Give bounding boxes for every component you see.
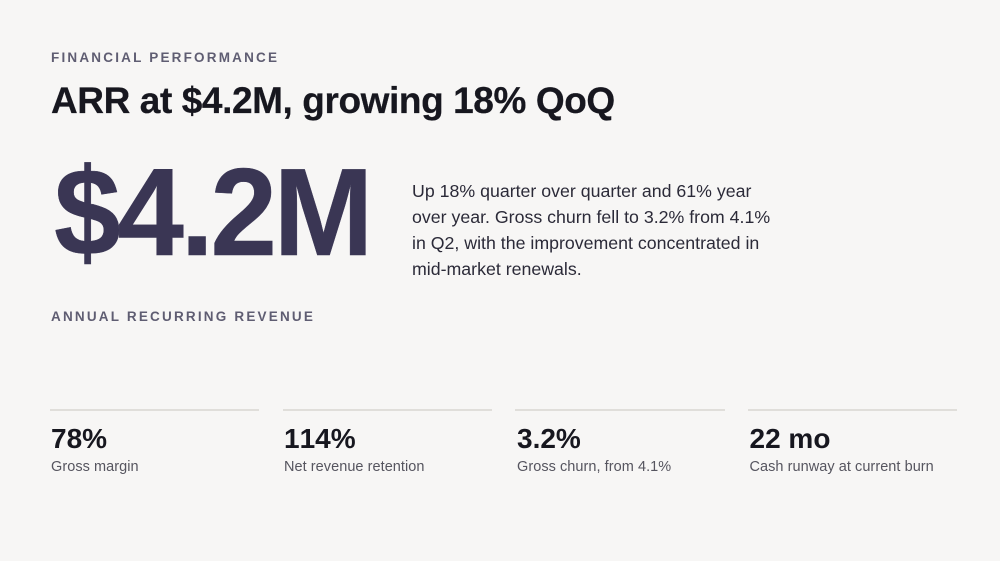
eyebrow label: FINANCIAL PERFORMANCE <box>51 50 279 65</box>
stat: net revenue retention: 114% <box>284 422 356 454</box>
description text: in Q2, with the improvement concentrated in <box>412 233 759 253</box>
description text: Up 18% quarter over quarter and 61% year <box>412 181 751 201</box>
stat: gross churn: 3.2% <box>517 422 581 454</box>
stat: gross margin: Gross margin <box>51 458 139 474</box>
description text: mid-market renewals. <box>412 259 582 279</box>
stat: gross margin: 78% <box>51 422 107 454</box>
hero number caption: ANNUAL RECURRING REVENUE <box>51 309 315 324</box>
stat: gross churn <box>515 409 725 481</box>
description text <box>412 181 770 279</box>
stat: gross margin <box>50 409 259 481</box>
stat: gross churn: Gross churn, from 4.1% <box>517 458 671 474</box>
description text: over year. Gross churn fell to 3.2% from 4.1% <box>412 207 770 227</box>
stat: cash runway: 22 mo <box>750 422 830 454</box>
stat: cash runway <box>748 409 957 481</box>
stat: net revenue retention: Net revenue retention <box>284 458 424 474</box>
hero number: $4.2M <box>54 143 370 282</box>
title: ARR at $4.2M, growing 18% QoQ <box>51 80 615 121</box>
stat: net revenue retention <box>282 409 492 481</box>
stat: cash runway: Cash runway at current burn <box>750 458 934 474</box>
